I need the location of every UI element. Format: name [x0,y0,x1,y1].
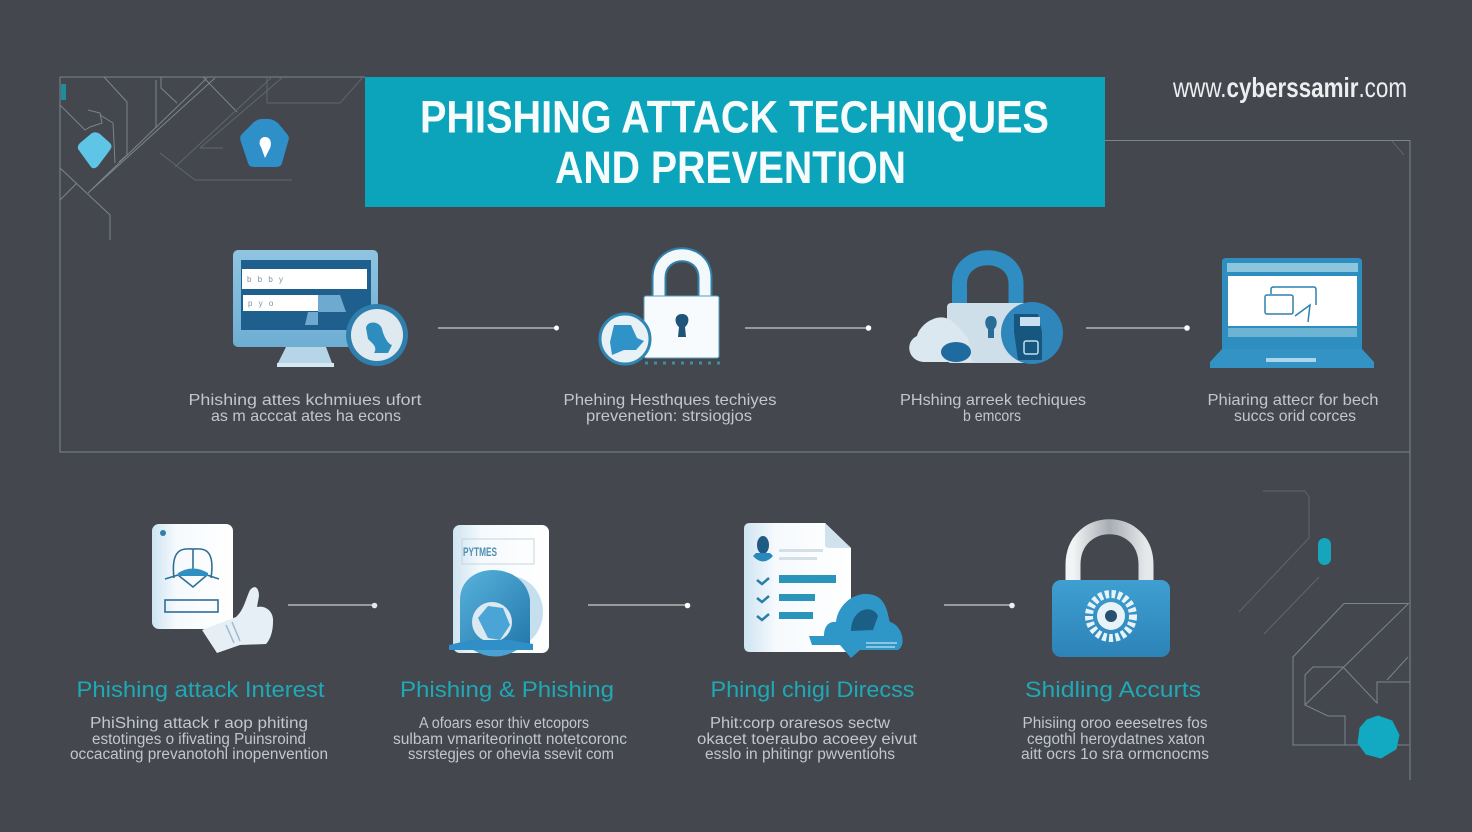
step 3 caption: b emcors [963,408,1021,425]
arrow 5 [288,603,377,608]
step 2 caption [564,392,776,425]
title line 1: PHISHING ATTACK TECHNIQUES [420,92,1049,142]
step 1: monitor icon: b b b y [247,275,285,284]
arrow 1 [438,326,559,330]
step 6 text: A ofoars esor thiv etcopors [419,715,589,732]
step 4 caption: Phiaring attecr for bech [1208,392,1378,409]
arrow 3 [1086,325,1190,331]
step 5 text: occacating prevanotohl inopenvention [70,746,328,763]
step 3: padlock, cloud and badge icon [909,258,1063,364]
step 7 text: okacet toeraubo acoeey eivut [697,731,918,748]
icon: teal hexagon [1358,716,1399,758]
step 1: monitor icon: p y o [248,299,275,308]
step 2: padlock icon [600,255,726,364]
website url: www.cyberssamir.com [1172,72,1407,103]
step 7 text: Phit:corp oraresos sectw [710,715,891,732]
step 1 caption: Phishing attes kchmiues ufort [188,392,422,409]
step 8 text: aitt ocrs 1o sra ormcnocms [1021,746,1209,763]
frame and circuit lines, top left [60,77,1410,780]
step 5 text: PhiShing attack r aop phiting [90,715,308,732]
step 7 text [697,677,918,763]
step 1 caption: as m acccat ates ha econs [211,408,401,425]
arrow 6 [588,603,690,608]
title line 2: AND PREVENTION [555,142,906,193]
title banner [365,77,1105,207]
arrow 2 [745,325,871,331]
icon: teal capsule [1318,538,1331,565]
step 6: document and shield icon: PYTMES [463,547,497,559]
step 6 text: sulbam vmariteorinott notetcoronc [393,731,627,748]
step 6 text: Phishing & Phishing [400,677,614,702]
step 5: phone card and thumbs up icon [152,524,273,653]
step 8 text [1021,677,1209,763]
icon: light blue gem [78,132,112,168]
step 2 caption: Phehing Hesthques techiyes [564,392,776,409]
arrow 7 [944,603,1015,608]
step 1 caption [188,392,422,425]
step 7 text: Phingl chigi Direcss [710,677,914,702]
step 4 caption: succs orid corces [1234,408,1356,425]
step 5 text [70,677,328,763]
step 8 text: Phisiing oroo eeesetres fos [1022,715,1208,732]
circuit lines, lower right [1239,491,1410,745]
step 2 caption: prevenetion: strsiogjos [586,408,752,425]
step 5 text: Phishing attack Interest [76,677,324,702]
step 6 text [393,677,627,763]
icon: pentagon badge [240,119,289,167]
step 5 text: estotinges o ifivating Puinsroind [92,731,306,748]
step 8 text: cegothl heroydatnes xaton [1027,731,1205,748]
step 7: checklist and cloud icon [744,523,903,658]
step 3 caption [900,392,1086,425]
step 7 text: esslo in phitingr pwventiohs [705,746,895,763]
icon: teal tab, top left corner [61,84,66,100]
step 4: laptop icon [1210,258,1374,368]
step 3 caption: PHshing arreek techiques [900,392,1086,409]
step 8 text: Shidling Accurts [1025,677,1201,702]
step 1: monitor icon [233,250,408,367]
step 8: blue padlock icon [1052,527,1170,657]
step 6 text: ssrstegjes or ohevia ssevit com [408,746,614,763]
step 4 caption [1208,392,1378,425]
step 6: document and shield icon [449,525,549,656]
